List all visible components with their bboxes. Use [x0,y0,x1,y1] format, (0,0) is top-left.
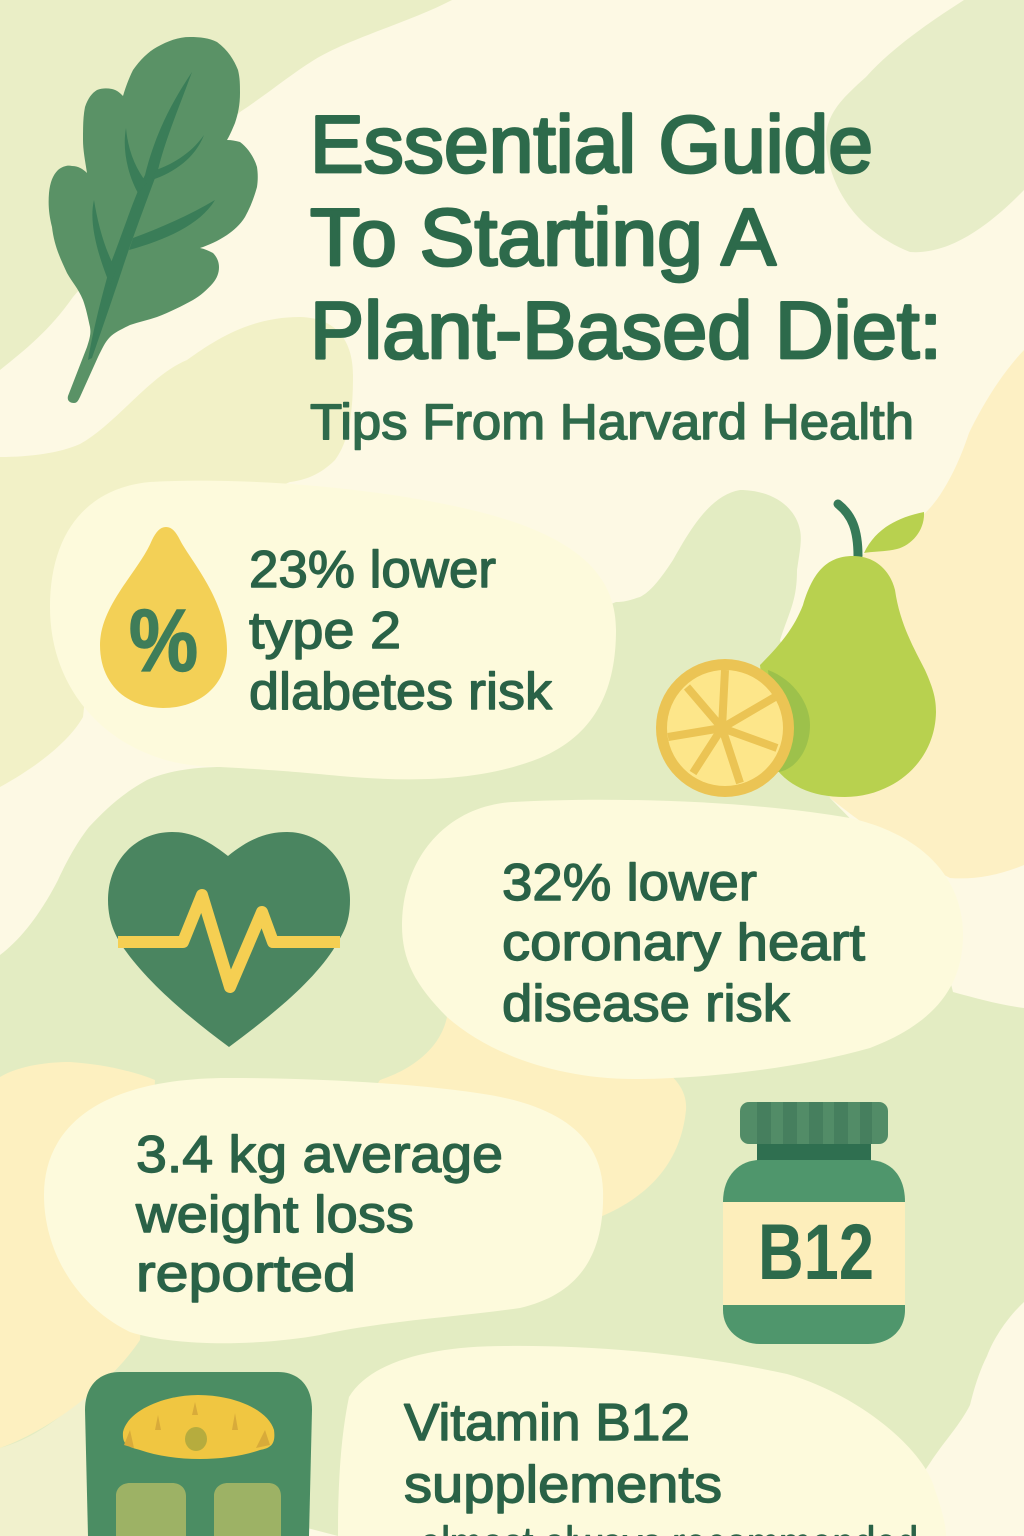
text: weight stat: reported [136,1245,356,1303]
icon: scale [85,1372,312,1536]
title [310,100,942,376]
text: heart stat: disease risk [502,975,791,1033]
text: weight stat [135,1126,503,1303]
panel: diabetes stat [50,481,616,779]
text: heart stat [502,854,866,1033]
icon: pear and lemon [656,504,936,797]
icon: B12 bottle: B12 [758,1207,874,1296]
icon: percent drop [100,527,227,708]
icon: heart with pulse [108,832,350,1047]
text: diabetes stat [249,541,553,721]
text: heart stat: coronary heart [502,914,866,972]
text: vitamin B12: supplements [404,1456,722,1514]
panel: vitamin B12 [338,1346,946,1536]
text: diabetes stat: dlabetes risk [249,663,553,721]
text: vitamin B12 [404,1394,918,1536]
subtitle: Tips From Harvard Health [310,394,914,450]
panel: heart stat [402,800,963,1079]
text: weight stat: 3.4 kg average [136,1126,503,1184]
panel: weight stat [44,1078,603,1343]
icon: percent drop: % [129,591,198,690]
text: weight stat: weight loss [135,1186,414,1244]
icon: leaf [49,37,258,403]
title: Plant-Based Diet: [310,286,942,376]
title: To Starting A [310,193,776,283]
text: diabetes stat: 23% lower [249,541,496,599]
title: Essential Guide [310,100,873,190]
icon: B12 bottle [723,1102,905,1344]
text: diabetes stat: type 2 [249,602,401,660]
text: heart stat: 32% lower [502,854,757,912]
text: vitamin B12: Vitamin B12 [404,1394,690,1452]
